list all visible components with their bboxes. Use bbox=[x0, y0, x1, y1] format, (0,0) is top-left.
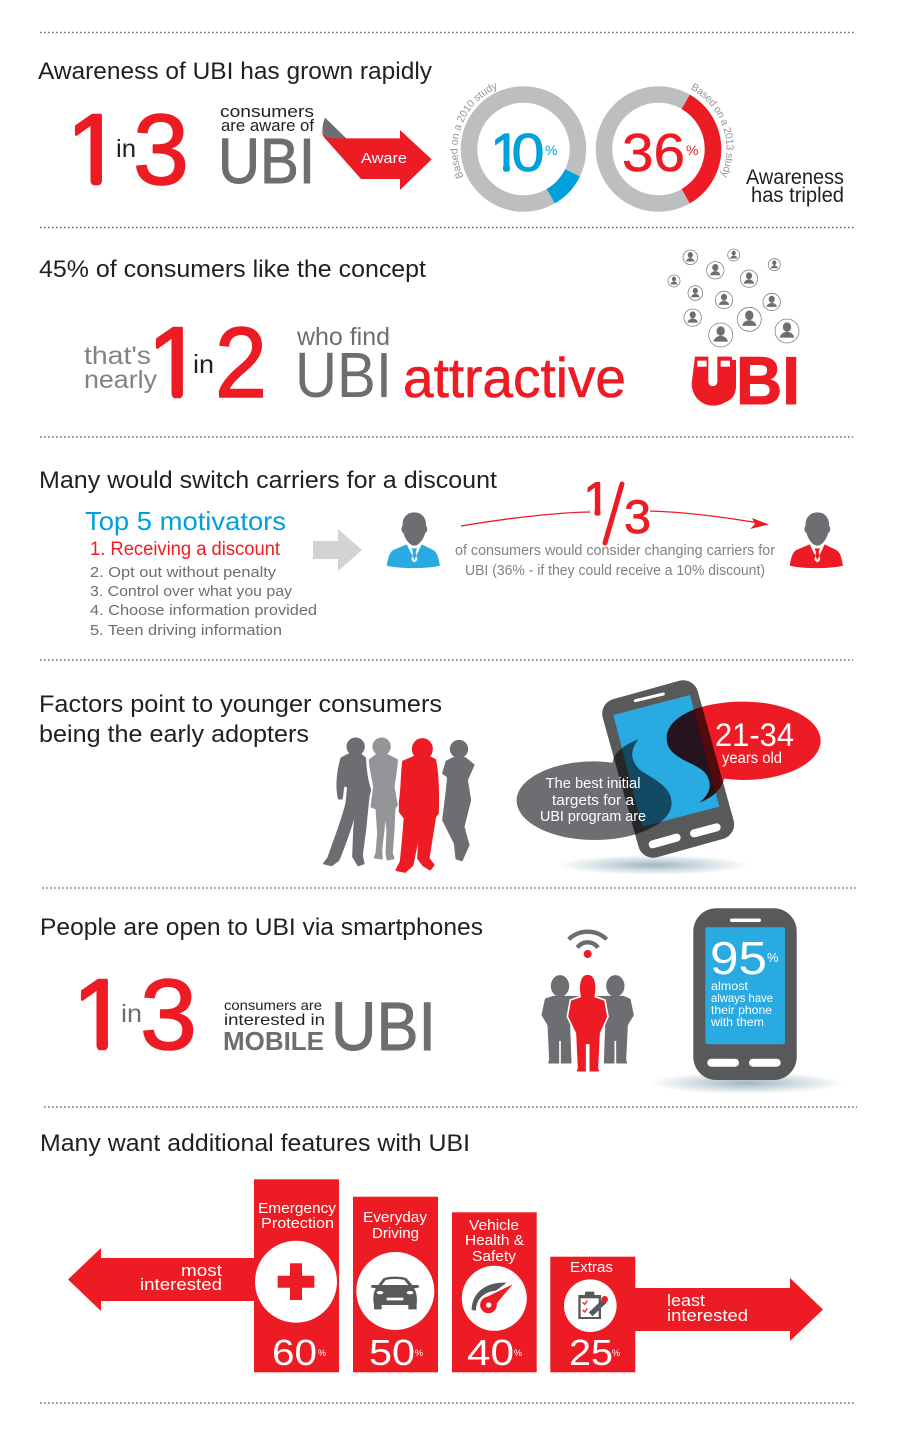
stat: 1 in 3 mobile bbox=[80, 978, 194, 1051]
column: vehicle health 40%: Safety bbox=[472, 1248, 517, 1265]
illustration: phone with speech bubbles bbox=[517, 677, 821, 875]
heading: concept: 45% of consumers like the concept bbox=[39, 256, 426, 283]
stat: nearly 1 in 2: nearly bbox=[84, 366, 158, 394]
text: awareness has tripled: has tripled bbox=[751, 184, 844, 207]
heading: early adopters: being the early adopters bbox=[39, 721, 309, 748]
arrow: most interested: interested bbox=[140, 1275, 222, 1294]
text: best initial targets bbox=[540, 775, 646, 825]
logo: UBI magnet: U bbox=[695, 348, 740, 417]
column: everyday driving 50%: 50 bbox=[369, 1332, 415, 1373]
text: interested in mobile UBI: UBI bbox=[331, 988, 436, 1065]
column: vehicle health 40%: Vehicle bbox=[469, 1217, 519, 1234]
text: who find UBI attractive bbox=[295, 323, 626, 411]
arrow: gray right bbox=[313, 529, 362, 571]
stat: nearly 1 in 2: 1 bbox=[148, 307, 203, 419]
illustration: phone 95%: always have bbox=[711, 991, 773, 1005]
donut chart: 36% in 2013: Based on a 2013 study bbox=[691, 83, 734, 178]
column: emergency protection 60% bbox=[254, 1179, 339, 1373]
text: interested in mobile UBI: consumers are bbox=[224, 997, 322, 1013]
illustration: phone 95%: with them bbox=[710, 1015, 764, 1029]
arrow: most interested: most bbox=[181, 1261, 222, 1280]
text: best initial targets: targets for a bbox=[552, 792, 635, 809]
stat: 1 in 3 mobile: in bbox=[121, 1000, 142, 1028]
illustration: phone 95%: almost bbox=[711, 979, 749, 993]
panel: switching carriers bbox=[39, 467, 843, 639]
icon: clipboard bbox=[578, 1292, 608, 1319]
heading: switching: Many would switch carriers for a discount bbox=[39, 467, 497, 494]
donut chart: 36% in 2013: 36 bbox=[622, 123, 685, 183]
donut chart: 10% in 2010: Based on a 2010 study bbox=[450, 83, 496, 179]
text: interested in mobile UBI: interested in bbox=[224, 1012, 325, 1029]
panel: younger consumers bbox=[39, 677, 821, 875]
text: 21-34 years old: years old bbox=[722, 750, 782, 767]
illustration: phone 95% bbox=[649, 908, 845, 1094]
text: interested in mobile UBI bbox=[223, 988, 436, 1065]
list: top 5 motivators: 5. Teen driving information bbox=[90, 622, 282, 639]
text: who find UBI attractive: attractive bbox=[403, 346, 626, 409]
icon: people and wifi bbox=[542, 932, 633, 1072]
icon: red person bbox=[790, 512, 843, 568]
column: vehicle health 40%: Health & bbox=[465, 1232, 524, 1249]
column: emergency protection 60%: Emergency bbox=[258, 1200, 337, 1217]
illustration: phone 95%: their phone bbox=[711, 1003, 772, 1017]
heading: smartphones: People are open to UBI via smartphones bbox=[40, 914, 483, 941]
text: best initial targets: UBI program are bbox=[540, 808, 646, 825]
stat: nearly 1 in 2: in bbox=[193, 349, 214, 379]
panel: awareness of UBI bbox=[38, 58, 844, 212]
panel: additional features bbox=[40, 1130, 823, 1373]
stat: nearly 1 in 2: 2 bbox=[215, 307, 267, 419]
heading: features: Many want additional features with UBI bbox=[40, 1130, 470, 1157]
column: everyday driving 50%: Driving bbox=[372, 1225, 419, 1242]
column: extras 25%: Extras bbox=[570, 1259, 613, 1276]
column: emergency protection 60%: % bbox=[318, 1348, 326, 1358]
text: changing carriers: UBI (36% - if they could receive a 10% discount) bbox=[465, 563, 765, 579]
arrow: curved red bbox=[461, 511, 765, 526]
column: vehicle health 40% bbox=[452, 1212, 537, 1373]
stat: 1 in 3 aware: 3 bbox=[133, 94, 189, 206]
heading: early adopters bbox=[39, 691, 442, 748]
stat: 1 in 3 mobile: 1 bbox=[73, 959, 128, 1071]
donut chart: 10% in 2010 bbox=[450, 83, 586, 212]
text: who find UBI attractive: who find bbox=[296, 323, 390, 351]
text: interested in mobile UBI: MOBILE bbox=[223, 1026, 324, 1056]
list: top 5 motivators: 4. Choose information provided bbox=[90, 602, 317, 619]
stat: 1 in 3 aware: in bbox=[116, 135, 136, 163]
stat: one third: 1 bbox=[584, 472, 610, 525]
column: extras 25%: % bbox=[612, 1348, 620, 1358]
list: top 5 motivators: 1. Receiving a discount bbox=[90, 539, 281, 560]
column: extras 25% bbox=[550, 1257, 635, 1373]
text: who find UBI attractive: UBI bbox=[295, 339, 392, 411]
icon: gauge bbox=[472, 1283, 513, 1313]
text: consumers are aware of UBI: consumers bbox=[220, 102, 314, 121]
arrowhead bbox=[750, 518, 769, 529]
list: top 5 motivators bbox=[85, 506, 317, 639]
donut chart: 36% in 2013 bbox=[596, 83, 734, 212]
donut chart: 10% in 2010: 1 bbox=[490, 123, 521, 183]
arrow: least interested: least bbox=[667, 1291, 705, 1310]
column: vehicle health 40%: % bbox=[514, 1348, 522, 1358]
stat: nearly 1 in 2 bbox=[84, 326, 264, 398]
text: consumers are aware of UBI: UBI bbox=[218, 125, 315, 197]
list: top 5 motivators: 3. Control over what you pay bbox=[90, 583, 293, 600]
donut chart: 36% in 2013: % bbox=[686, 142, 698, 158]
text: consumers are aware of UBI: are aware of bbox=[221, 116, 314, 135]
column: extras 25%: 25 bbox=[569, 1332, 613, 1373]
icon: blue person bbox=[387, 512, 440, 568]
text: changing carriers bbox=[455, 543, 775, 579]
column: everyday driving 50%: % bbox=[415, 1348, 423, 1358]
arrow: most interested bbox=[68, 1248, 256, 1311]
heading: early adopters: Factors point to younger consumers bbox=[39, 691, 442, 718]
column: everyday driving 50%: Everyday bbox=[363, 1209, 428, 1226]
text: changing carriers: of consumers would consider changing carriers for bbox=[455, 543, 775, 559]
column: everyday driving 50% bbox=[353, 1197, 438, 1373]
logo: UBI magnet: BI bbox=[736, 343, 800, 419]
stat: one third bbox=[586, 482, 650, 546]
stat: 1 in 3 aware bbox=[74, 113, 186, 186]
stat: one third: 3 bbox=[624, 490, 651, 543]
column: emergency protection 60%: Protection bbox=[261, 1215, 334, 1232]
text: awareness has tripled bbox=[746, 166, 844, 207]
arrow: aware ribbon bbox=[322, 118, 432, 190]
list: top 5 motivators: 2. Opt out without penalty bbox=[90, 564, 277, 581]
column: emergency protection 60%: 60 bbox=[272, 1332, 317, 1373]
text: awareness has tripled: Awareness bbox=[746, 166, 844, 189]
illustration: phone 95%: 95 bbox=[710, 932, 767, 984]
arrow: least interested bbox=[634, 1278, 823, 1341]
panel: smartphones bbox=[40, 908, 845, 1094]
panel: likes the concept bbox=[39, 249, 800, 419]
text: best initial targets: The best initial bbox=[546, 775, 640, 792]
arrow: least interested: interested bbox=[667, 1306, 748, 1325]
icon: crowd of people bbox=[668, 249, 799, 347]
stat: nearly 1 in 2: that's bbox=[84, 342, 151, 370]
arrow: aware ribbon: Aware bbox=[361, 150, 407, 167]
heading: awareness: Awareness of UBI has grown rapidly bbox=[38, 58, 433, 85]
text: 21-34 years old: 21-34 bbox=[715, 717, 794, 753]
illustration: phone 95%: % bbox=[767, 950, 779, 965]
donut chart: 10% in 2010: % bbox=[545, 142, 557, 158]
stat: 1 in 3 mobile: 3 bbox=[140, 959, 197, 1071]
logo: UBI magnet bbox=[692, 343, 800, 419]
list: top 5 motivators: Top 5 motivators bbox=[85, 506, 286, 536]
illustration: group of young people bbox=[324, 739, 473, 872]
column: vehicle health 40%: 40 bbox=[467, 1332, 514, 1373]
icon: car bbox=[371, 1277, 419, 1309]
donut chart: 10% in 2010: 0 bbox=[512, 123, 544, 183]
stat: 1 in 3 aware: 1 bbox=[67, 94, 122, 206]
